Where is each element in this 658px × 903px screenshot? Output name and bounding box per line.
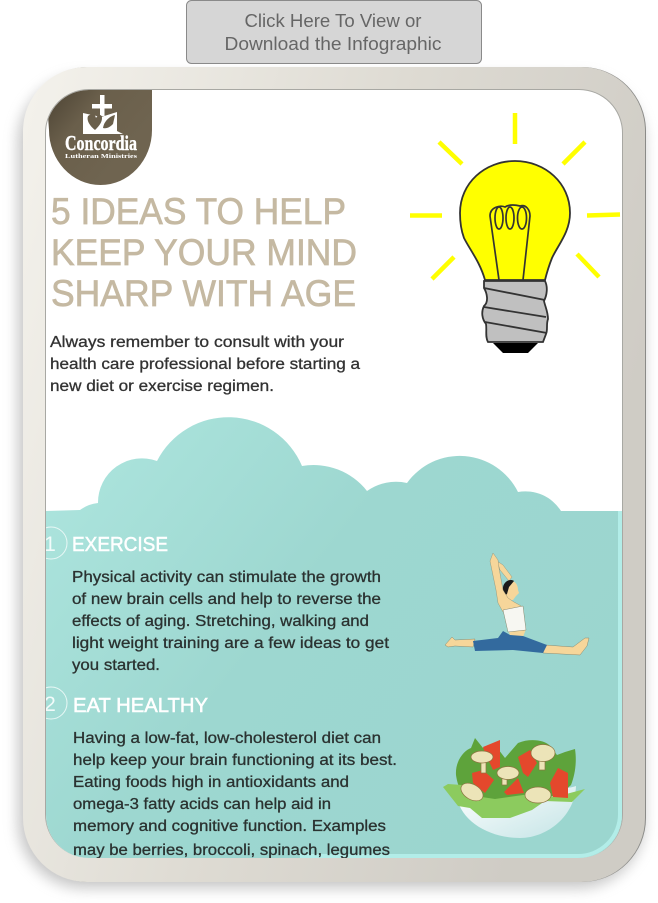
number badge 1	[46, 526, 68, 560]
mushrooms	[458, 744, 555, 804]
body text: eat healthy: Eating foods high in antioxidants and	[73, 774, 349, 791]
bowl	[457, 786, 576, 838]
body text: exercise: of new brain cells and help to reverse the	[72, 591, 381, 608]
body text: eat healthy: Having a low-fat, low-cholesterol diet can	[73, 730, 381, 747]
section 1: exercise	[35, 527, 390, 674]
top	[503, 606, 526, 632]
logo tagline: Lutheran Ministries	[65, 153, 138, 160]
logo badge	[46, 89, 152, 185]
head and face	[506, 582, 519, 600]
intro text	[50, 334, 360, 395]
body text: eat healthy: omega-3 fatty acids can help aid in	[73, 796, 331, 813]
body text: eat healthy: help keep your brain functioning at its best.	[73, 752, 397, 769]
front arm and torso	[490, 553, 523, 612]
title: SHARP WITH AGE	[51, 273, 356, 314]
button: view or download: Click Here To View or	[244, 11, 422, 31]
icon: yoga figure doing splits	[445, 553, 589, 655]
logo wordmark: Concordia	[65, 131, 137, 155]
number badge 2	[46, 686, 68, 720]
icon: cross, heart and book	[83, 95, 123, 134]
waist	[508, 630, 526, 636]
shorts	[473, 631, 547, 653]
title: 5 IDEAS TO HELP	[51, 191, 346, 232]
bulb screw base	[482, 281, 548, 342]
screen edge highlight	[300, 511, 622, 858]
bulb tip	[493, 343, 538, 353]
button: view or download	[186, 0, 482, 64]
title	[52, 198, 356, 307]
back leaves	[456, 738, 576, 803]
section 2: eat healthy	[35, 687, 397, 859]
button: view or download: Download the Infographic	[224, 34, 442, 54]
heading: eat healthy: EAT HEALTHY	[73, 695, 208, 717]
body text: exercise: effects of aging. Stretching, walking and	[72, 613, 369, 630]
icon: light bulb	[410, 113, 620, 353]
intro text: Always remember to consult with your	[50, 334, 344, 351]
cloud band	[46, 417, 622, 858]
heading: exercise: EXERCISE	[72, 534, 168, 556]
bulb glass	[460, 161, 570, 280]
left leg	[445, 637, 475, 647]
front leaves	[443, 784, 585, 818]
intro text: health care professional before starting a	[50, 356, 360, 373]
right leg	[543, 638, 589, 655]
back arm	[497, 561, 512, 581]
infographic screen	[35, 89, 622, 859]
number badge 2: 2	[44, 693, 56, 716]
body text: exercise: you started.	[72, 657, 160, 674]
body text: exercise	[72, 569, 390, 674]
body text: eat healthy: memory and cognitive function. Examples	[73, 818, 386, 835]
peppers	[472, 740, 568, 798]
icon: salad bowl	[443, 738, 585, 838]
title: KEEP YOUR MIND	[51, 232, 357, 273]
body text: exercise: Physical activity can stimulate the growth	[72, 569, 381, 586]
intro text: new diet or exercise regimen.	[50, 378, 274, 395]
body text: exercise: light weight training are a few ideas to get	[72, 635, 390, 652]
body text: eat healthy: may be berries, broccoli, spinach, legumes	[73, 842, 390, 859]
bulb filament	[490, 205, 530, 280]
bulb rays	[410, 113, 620, 279]
body text: eat healthy	[73, 730, 397, 859]
number badge 1: 1	[44, 533, 56, 556]
